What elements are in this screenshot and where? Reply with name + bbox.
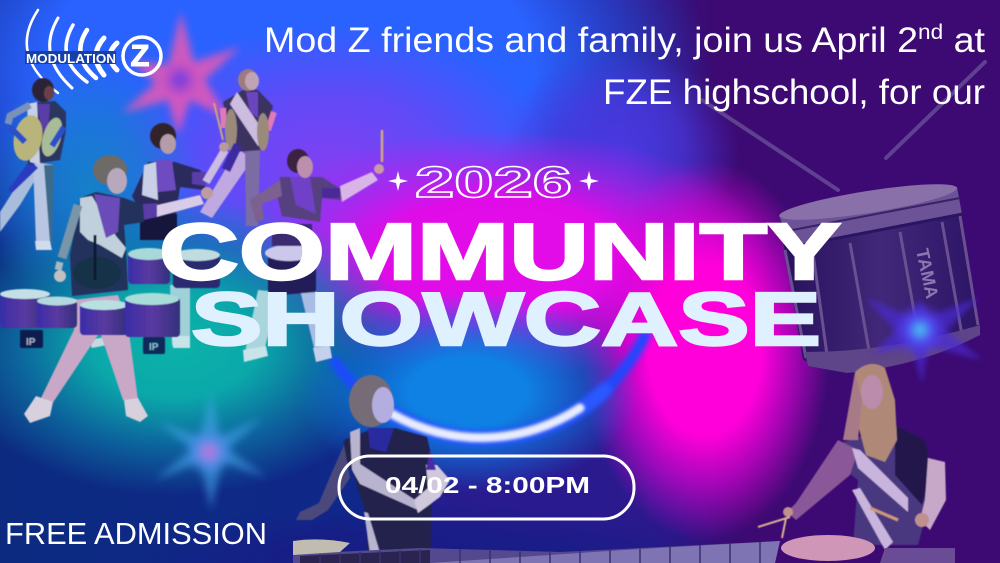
title: COMMUNITY: COMMUNITY bbox=[159, 207, 841, 296]
free admission label: FREE ADMISSION bbox=[5, 516, 267, 551]
logo: Modulation Z: Z bbox=[130, 38, 150, 73]
heading: invitation line 1: nd bbox=[918, 21, 943, 44]
heading: invitation line 1: Mod Z friends and family, join us April 2 bbox=[264, 21, 872, 60]
icon: snare drum bbox=[777, 177, 980, 373]
logo: Modulation Z bbox=[25, 10, 161, 93]
icon: sparkle right bbox=[579, 171, 599, 191]
icon: quad drums bbox=[0, 248, 220, 354]
person: bottom right percussionist bbox=[758, 364, 946, 550]
person: top drummer bbox=[200, 69, 274, 226]
icon: sparkle left bbox=[388, 171, 408, 191]
date pill: 04/02 - 8:00PM bbox=[385, 472, 590, 498]
person: middle drummer bbox=[88, 123, 229, 348]
person: front drummer bbox=[24, 155, 213, 423]
icon: snare drum: TAMA bbox=[912, 247, 942, 300]
person: cymbal player bbox=[0, 78, 66, 250]
icon: cyan star bbox=[865, 297, 982, 384]
icon: drumstick left bbox=[702, 100, 838, 190]
icon: quad drums: IP bbox=[149, 342, 159, 353]
icon: blue star bbox=[155, 392, 266, 510]
logo: Modulation Z: MODULATION bbox=[26, 51, 116, 66]
date pill bbox=[339, 456, 634, 519]
icon: pink star bbox=[122, 12, 240, 135]
person: right drummer bbox=[243, 130, 384, 362]
heading: invitation line 1: at bbox=[943, 21, 985, 60]
glowing ring arc bbox=[335, 335, 645, 438]
year: 2026: 2026 bbox=[415, 158, 572, 207]
title: SHOWCASE: SHOWCASE bbox=[191, 277, 821, 361]
heading: invitation line 2: FZE highschool, for our bbox=[603, 73, 985, 112]
icon: marimba and cymbals bbox=[293, 535, 955, 563]
icon: drumstick right bbox=[886, 62, 985, 158]
icon: quad drums: IP bbox=[26, 337, 36, 348]
person: bottom left percussionist bbox=[296, 375, 450, 553]
